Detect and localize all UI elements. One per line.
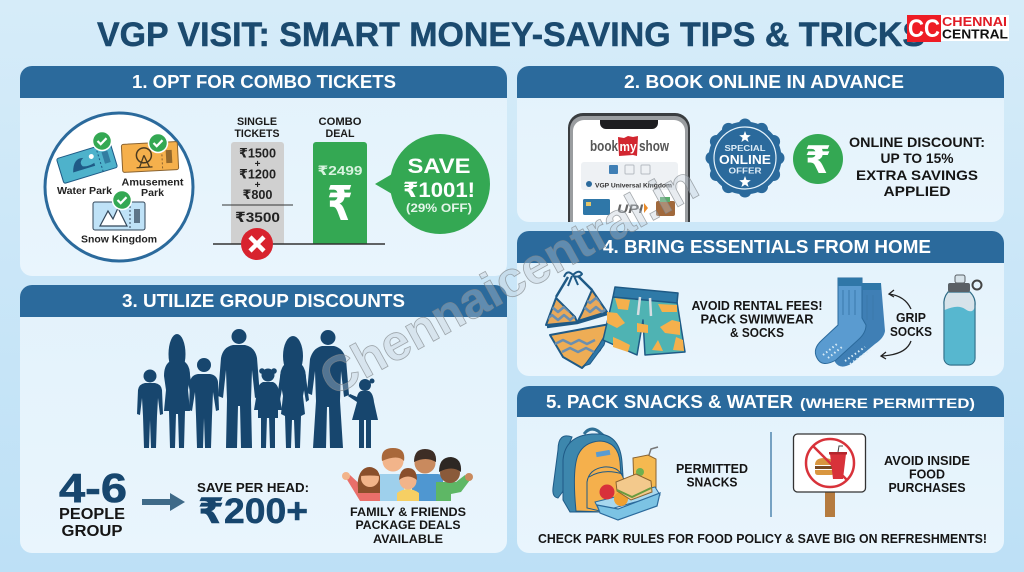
silhouette: girl 2 [348, 378, 378, 448]
text: family and friends: AVAILABLE [373, 532, 443, 546]
label: grip socks with arrows: GRIP [896, 310, 926, 325]
bar: single tickets: ₹1200 [239, 166, 276, 182]
badge: special online offer: OFFER [728, 166, 762, 176]
chart: single tickets vs combo deal [213, 116, 385, 260]
heading: group discounts: 3. UTILIZE GROUP DISCOUNTS [122, 291, 405, 311]
text: avoid inside food: PURCHASES [888, 480, 966, 495]
text: avoid inside food: AVOID INSIDE [884, 453, 970, 468]
text: avoid rental fees: & SOCKS [730, 325, 784, 340]
label: combo deal: COMBO [318, 116, 362, 128]
silhouette: woman 1 [164, 334, 193, 448]
bar: single tickets [222, 142, 293, 244]
callout: save 1001: (29% OFF) [406, 201, 472, 215]
text: avoid inside food [884, 453, 970, 495]
panel: combo tickets [20, 66, 507, 276]
heading: pack snacks: 5. PACK SNACKS & WATER [546, 392, 793, 412]
label: single tickets: SINGLE [237, 116, 277, 128]
icon: rupee circle [793, 134, 843, 184]
text: online discount: EXTRA SAVINGS [856, 167, 978, 183]
icon: water park ticket [56, 142, 118, 184]
illustration: family silhouettes [137, 329, 378, 448]
label: single tickets [234, 116, 280, 140]
heading: combo tickets: 1. OPT FOR COMBO TICKETS [132, 72, 396, 92]
heading: book online: 2. BOOK ONLINE IN ADVANCE [624, 72, 904, 92]
silhouette: woman 2 [277, 336, 309, 448]
silhouette: boy 2 [189, 358, 219, 448]
icon: red cross [241, 228, 273, 260]
logo: Chennai Central: CHENNAI [942, 14, 1007, 29]
label: amusement park [122, 176, 184, 199]
stat: save per head: SAVE PER HEAD: [197, 480, 309, 495]
silhouette: man 2 [307, 330, 349, 448]
label: amusement park: Park [141, 187, 164, 199]
icon: phone with booking app: UPI [617, 202, 644, 216]
icon group: three park tickets [45, 113, 193, 261]
badge: special online offer [706, 118, 784, 198]
text: avoid rental fees [692, 298, 822, 340]
label: water park: Water Park [57, 185, 112, 197]
text: online discount: UP TO 15% [880, 150, 954, 166]
text: family and friends [350, 505, 466, 546]
heading: pack snacks: (WHERE PERMITTED) [800, 395, 975, 411]
text: permitted snacks: SNACKS [686, 474, 738, 490]
panel: group discounts [20, 285, 507, 553]
panel: bring essentials [517, 231, 1004, 376]
text: family and friends: PACKAGE DEALS [356, 518, 460, 532]
bar: single tickets: ₹1500 [239, 146, 276, 160]
text: avoid rental fees: AVOID RENTAL FEES! [692, 298, 822, 313]
icon: amusement park ticket [121, 142, 179, 172]
text: online discount: APPLIED [884, 183, 950, 199]
bar: single tickets: ₹800 [242, 187, 272, 202]
bar: combo deal [313, 142, 367, 244]
illustration: bikini [546, 272, 610, 368]
logo: bookmyshow: show [639, 138, 669, 155]
bar: single tickets: + [255, 159, 261, 170]
text: avoid inside food: FOOD [909, 466, 945, 482]
badge: special online offer: ONLINE [719, 153, 771, 167]
text: avoid rental fees: PACK SWIMWEAR [700, 312, 814, 326]
bar: combo deal: ₹2499 [318, 163, 362, 178]
bar: single tickets: + [255, 180, 261, 191]
panel: book online [517, 66, 1004, 222]
icon: phone with booking app: VGP Universal Kingdom [595, 182, 672, 190]
logo: Chennai Central: CC [908, 15, 940, 43]
icon: no outside food sign [794, 434, 866, 517]
callout: save 1001: ₹1001! [403, 179, 475, 202]
label: amusement park: Amusement [122, 176, 184, 188]
icon: phone with booking app [568, 113, 690, 222]
text: online discount: ONLINE DISCOUNT: [849, 134, 985, 150]
label: combo deal [318, 116, 362, 140]
icon: check water park [92, 132, 112, 150]
label: grip socks with arrows [881, 290, 932, 359]
heading: group discounts [20, 285, 507, 317]
icon: check snow kingdom [112, 190, 132, 210]
text: online discount [849, 134, 985, 199]
illustration: juice box [633, 447, 658, 488]
illustration: backpack [553, 429, 624, 512]
panel: pack snacks [517, 386, 1004, 553]
text: permitted snacks [676, 461, 748, 490]
stat: 4-6 people group: 4-6 [59, 465, 127, 511]
stat: 4-6 people group: GROUP [62, 523, 123, 540]
text: family and friends: FAMILY & FRIENDS [350, 505, 466, 519]
illustration: water bottle [944, 275, 982, 365]
bar: combo deal: ₹ [327, 178, 353, 231]
silhouette: man 1 [218, 329, 260, 448]
icon: rupee circle: ₹ [805, 140, 831, 182]
heading: bring essentials [517, 231, 1004, 263]
label: grip socks with arrows: SOCKS [890, 324, 932, 339]
title: VGP VISIT: SMART MONEY-SAVING TIPS & TRICKS [97, 16, 925, 54]
silhouette: boy 1 [137, 370, 163, 448]
logo: Chennai Central: CENTRAL [942, 26, 1008, 42]
text: check park rules: CHECK PARK RULES FOR FOOD POLICY & SAVE BIG ON REFRESHMENTS! [538, 532, 987, 546]
label: combo deal: DEAL [326, 128, 355, 140]
illustration: lunch box with food [595, 474, 660, 520]
silhouette: girl 1 [254, 368, 282, 448]
illustration: grip socks [815, 278, 885, 367]
logo: bookmyshow: book [590, 138, 619, 155]
icon: check amusement park [148, 134, 168, 152]
arrow: group to savings [142, 493, 185, 511]
label: snow kingdom: Snow Kingdom [81, 234, 157, 246]
text: permitted snacks: PERMITTED [676, 461, 748, 476]
heading: pack snacks [517, 386, 1004, 417]
badge: special online offer: SPECIAL [724, 143, 766, 153]
bar: single tickets: ₹3500 [235, 209, 280, 225]
heading: combo tickets [20, 66, 507, 98]
stat: 4-6 people group [59, 465, 127, 540]
callout: save 1001 [375, 134, 490, 234]
logo: bookmyshow [590, 136, 669, 156]
watermark: chennaicentral.in: Chennaicentral.in [310, 154, 707, 407]
stat: save per head: ₹200+ [198, 492, 308, 531]
illustration: happy family group [342, 448, 473, 501]
heading: book online [517, 66, 1004, 98]
stat: 4-6 people group: PEOPLE [59, 506, 125, 523]
logo: bookmyshow: my [620, 139, 637, 154]
icon: snow kingdom ticket [93, 202, 145, 230]
label: single tickets: TICKETS [234, 128, 280, 140]
illustration: swim trunks [603, 287, 685, 355]
heading: bring essentials: 4. BRING ESSENTIALS FROM HOME [603, 237, 931, 257]
logo: Chennai Central [907, 14, 1009, 43]
callout: save 1001: SAVE [408, 155, 470, 178]
